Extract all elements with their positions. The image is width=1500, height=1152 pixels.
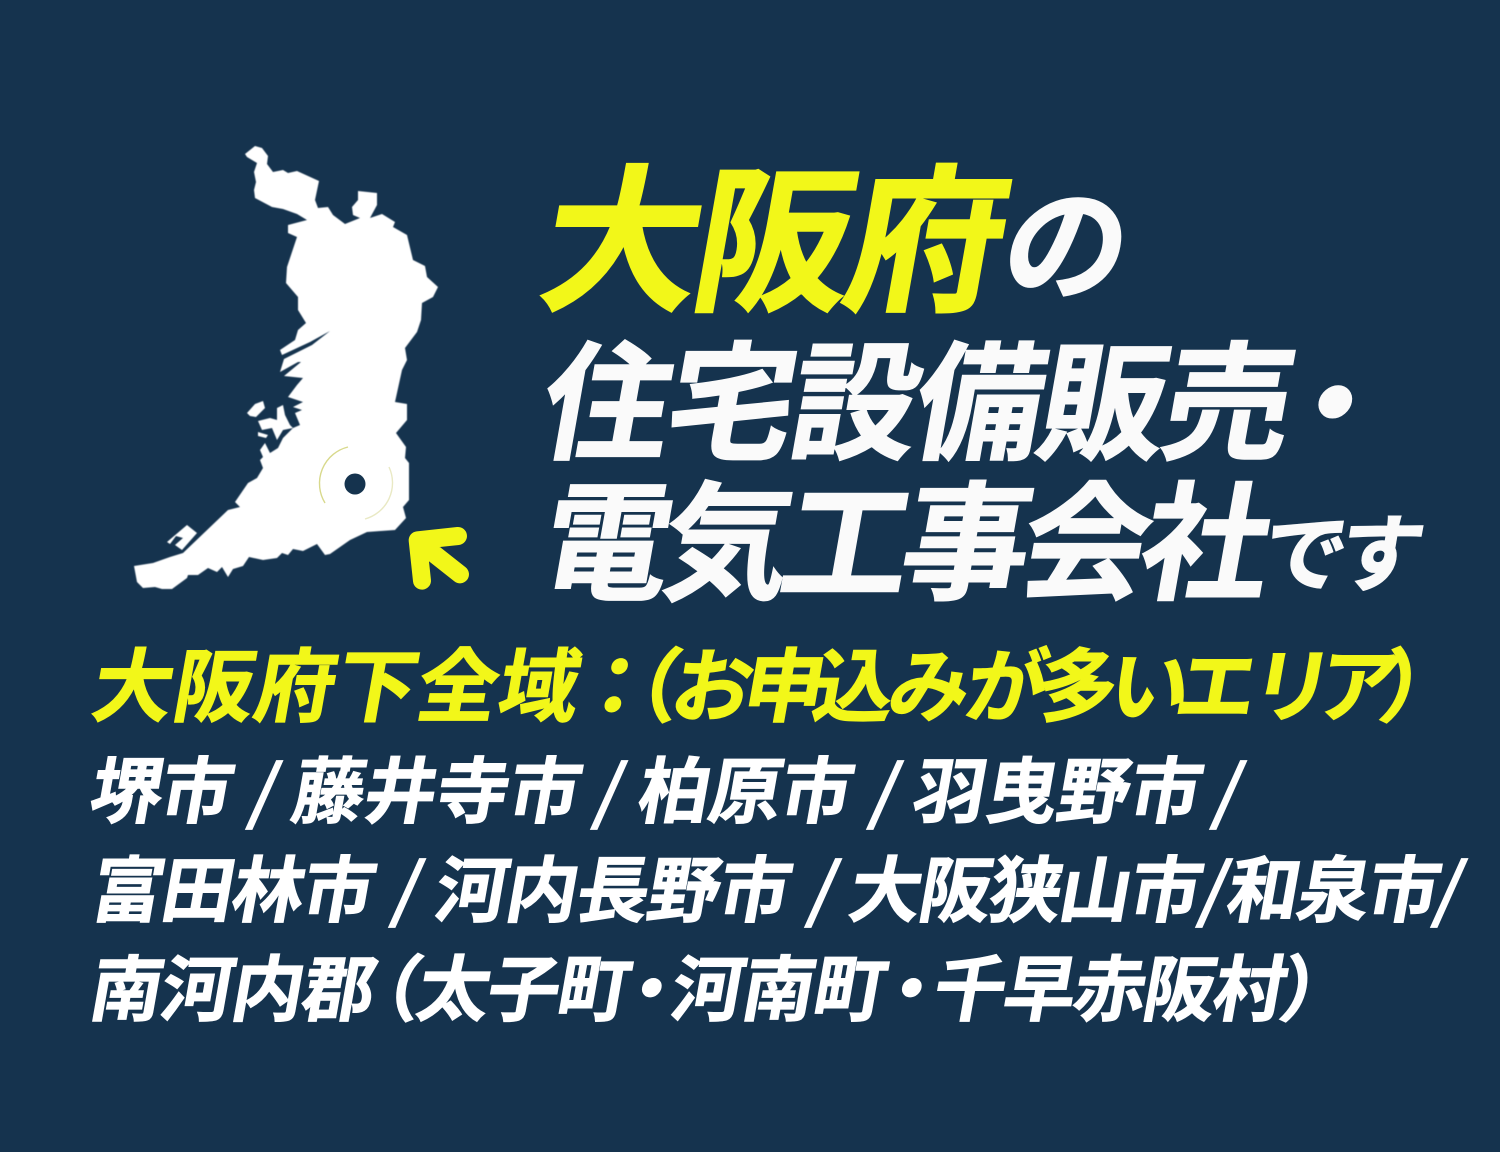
- city list line 1: [84, 744, 1251, 850]
- area heading: 大阪府下全域: [86, 644, 588, 733]
- title line 1: 大阪府: [529, 155, 1022, 332]
- city list line 3: 河南町: [665, 950, 893, 1031]
- city list line 3: （: [342, 950, 428, 1031]
- area heading: ）: [1374, 644, 1470, 733]
- area heading: お申込みが多いエリア: [665, 644, 1406, 733]
- city list line 2: [85, 842, 1472, 948]
- city list line 2: 河内長野市: [429, 851, 798, 932]
- city list line 2: /: [1426, 842, 1472, 948]
- city list line 1: /: [1205, 744, 1251, 850]
- city list line 3: 太子町: [411, 950, 637, 1031]
- city list line 2: 和泉市: [1221, 851, 1447, 932]
- city list line 3: 千早赤阪村: [927, 950, 1293, 1031]
- city list line 3: ・: [868, 950, 954, 1031]
- city list line 1: /: [586, 744, 632, 850]
- city list line 2: 富田林市: [85, 851, 382, 932]
- main title: [529, 155, 1431, 617]
- title line 3: です: [1255, 508, 1431, 602]
- city list line 1: 堺市: [84, 752, 240, 833]
- city list line 2: /: [800, 842, 846, 948]
- title line 1: の: [992, 179, 1141, 317]
- target marker: [319, 447, 393, 519]
- city list line 2: /: [1191, 842, 1237, 948]
- city list line 2: 大阪狭山市: [843, 851, 1209, 932]
- map of Osaka prefecture: [134, 146, 438, 589]
- city list line 2: /: [384, 842, 430, 948]
- title line 2: 住宅設備販売: [531, 334, 1305, 477]
- arrow pointing at the map: [418, 536, 460, 581]
- city list line 3: 南河内郡: [84, 950, 382, 1031]
- city list line 1: /: [862, 744, 908, 850]
- city list line 1: /: [241, 744, 287, 850]
- title line 3: 電気工事会社: [531, 474, 1283, 617]
- city list line 1: 柏原市: [632, 752, 860, 833]
- city list line 1: 羽曳野市: [907, 752, 1209, 833]
- city list line 3: ・: [608, 950, 694, 1031]
- area heading: （: [592, 644, 688, 733]
- city list line 3: [84, 950, 1360, 1031]
- area heading: ：: [568, 644, 664, 733]
- area heading: [86, 644, 1470, 733]
- city list line 3: ）: [1274, 950, 1360, 1031]
- city list line 1: 藤井寺市: [286, 752, 588, 833]
- title line 2: ・: [1260, 338, 1409, 476]
